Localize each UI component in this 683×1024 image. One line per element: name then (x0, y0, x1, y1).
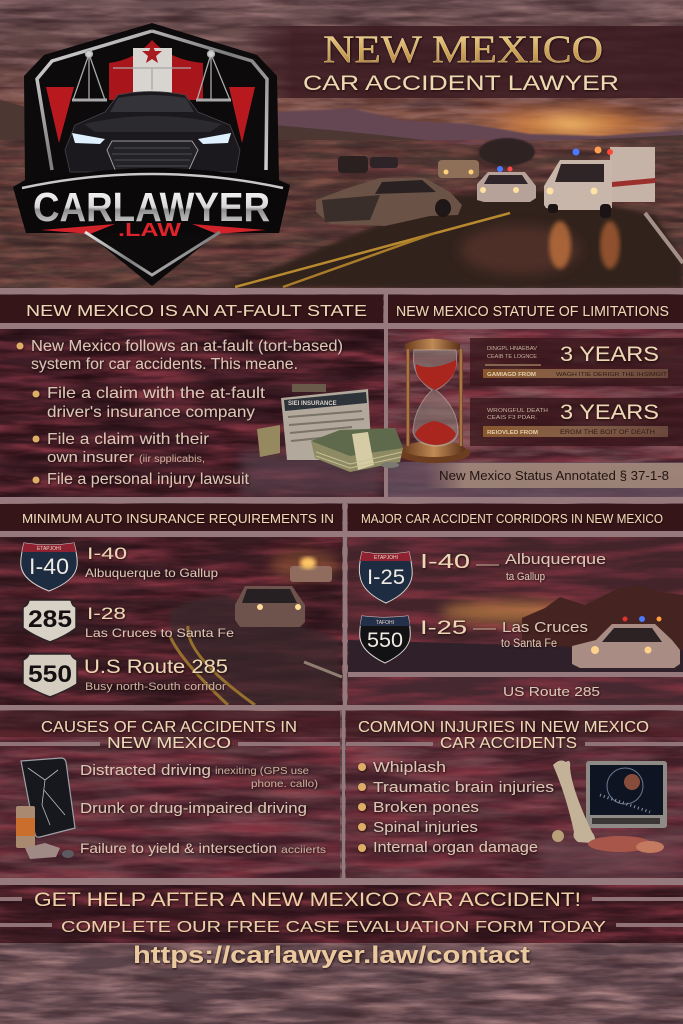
icon: bone (553, 761, 595, 843)
panel texture (388, 329, 683, 497)
band texture (0, 885, 683, 943)
heading: NEW MEXICO IS AN AT-FAULT STATE (26, 303, 367, 320)
citation band (425, 463, 683, 488)
panel: call to action (0, 885, 683, 969)
icon: hourglass (398, 338, 470, 463)
ambulance (544, 146, 655, 218)
header band (0, 504, 342, 531)
label: I-40: I-40 (87, 544, 127, 563)
wet road (225, 190, 683, 288)
label: I-40 Albuquerque: Albuquerque (505, 552, 606, 568)
panel: at-fault state (0, 295, 384, 497)
panel: statute of limitations (388, 295, 683, 497)
label: U.S Route 285 (84, 657, 228, 693)
desert ground (0, 100, 683, 288)
icon: small cash stack (257, 425, 280, 457)
statute block 2: WRONGFUL DEATH (487, 408, 548, 414)
panel: major corridors (348, 504, 683, 705)
icon: rocks (25, 843, 74, 859)
section dividers (0, 288, 683, 885)
3 years: 3 YEARS (560, 343, 659, 366)
red and white crest (46, 40, 255, 143)
lower chevron (85, 232, 220, 275)
title (303, 28, 619, 95)
label: I-28: Las Cruces to Santa Fe (85, 626, 234, 640)
bullet intro: system for car accidents. This meane. (31, 356, 298, 373)
panel scene (348, 537, 683, 705)
bullet list: File a personal injury lawsuit (47, 471, 250, 488)
statute block 2 (483, 401, 668, 437)
bullet list: own insurer (47, 449, 134, 466)
label: I-25 Las Cruces: I-25 (420, 618, 467, 639)
label: I-25 Las Cruces (420, 618, 588, 650)
causes list (80, 762, 326, 856)
icon: route shield 285: 285 (28, 606, 72, 633)
icon: route shield 550: 550 (28, 661, 72, 688)
icon: distant cars (290, 557, 332, 582)
mountains (274, 108, 683, 150)
bullet list: File a claim with the at-fault (47, 385, 266, 402)
scales of justice (72, 50, 231, 100)
heading rule (346, 742, 683, 746)
injuries list: Internal organ damage (373, 839, 538, 856)
statute block 2: REIOVLED FROM (487, 430, 538, 436)
citation: New Mexico Status Annotated § 37-1-8 (439, 469, 669, 483)
label: I-28 (85, 604, 234, 640)
causes list: Failure to yield & intersection (80, 840, 277, 856)
icon: interstate shield I-40: I-40 (29, 554, 69, 579)
shield body (13, 23, 290, 286)
statute block 1: DINGPL HNAEBAV (487, 346, 537, 352)
title line 1: NEW MEXICO (323, 28, 603, 71)
distant pickup (438, 160, 479, 178)
icon: interstate shield I-25: I-25 (367, 566, 405, 589)
heading: CAR ACCIDENTS (440, 735, 577, 752)
label: U.S Route 285: Busy north-South corridor (85, 681, 226, 693)
.law: .LAW (118, 220, 181, 240)
bullet list: driver's insurance company (47, 404, 255, 421)
icon: insurance form (281, 384, 372, 460)
panel: common injuries (346, 711, 683, 878)
icon: pill bottle (16, 806, 35, 848)
panel: minimum auto insurance (0, 504, 342, 705)
desert sky (0, 0, 683, 146)
panel texture (0, 329, 384, 497)
statute block 2: CEAIS F3 PDAR. (487, 415, 537, 421)
icon: route shield 550 (23, 654, 77, 697)
injuries list: Whiplash (373, 759, 446, 776)
icon: insurance form: SIEI INSURANCE (288, 401, 337, 407)
heading: MINIMUM AUTO INSURANCE REQUIREMENTS IN (22, 511, 334, 526)
label: I-40 Albuquerque (420, 551, 606, 583)
icon: interstate shield 550: 550 (367, 629, 403, 652)
statute block 1: CEAIB TE LOGNCE (487, 354, 537, 360)
label: I-40: Albuquerque to Gallup (85, 566, 218, 580)
label: U.S Route 285: U.S Route 285 (84, 657, 228, 678)
tree (479, 138, 535, 166)
panel: hero scene (0, 0, 683, 288)
bullet list: File a claim with their (47, 431, 210, 448)
headline: GET HELP AFTER A NEW MEXICO CAR ACCIDENT! (34, 890, 581, 911)
red wings (41, 224, 266, 234)
panel: causes of car accidents (0, 711, 340, 878)
icon: interstate shield I-40 (21, 543, 77, 591)
statute block 2: ERGM THE BOIT OF DEATH (560, 429, 655, 436)
label: I-28: I-28 (87, 604, 126, 623)
header band (348, 504, 683, 531)
injuries list: Broken pones (373, 799, 479, 816)
injuries list: Spinal injuries (373, 819, 478, 836)
heading rule (0, 742, 340, 746)
bullet list (32, 385, 266, 488)
icon: cash bundle (311, 428, 403, 472)
header band (388, 295, 683, 323)
causes list: inexiting (GPS use (215, 765, 309, 777)
url: https://carlawyer.law/contact (133, 942, 530, 969)
icon: interstate shield I-25: ETAPJOHI (374, 555, 398, 561)
injuries list: Traumatic brain injuries (373, 779, 554, 796)
icon: car on road (235, 586, 305, 627)
icon: interstate shield I-40: ETAPJOHI (37, 546, 61, 552)
icon: x-ray monitor (586, 761, 667, 828)
heading: CAUSES OF CAR ACCIDENTS IN (41, 719, 297, 736)
police car (477, 166, 536, 202)
illustration: insurance form and cash (257, 384, 403, 472)
logo banner (13, 168, 290, 240)
car front (65, 92, 240, 172)
wordmark: CARLAWYER (33, 184, 270, 230)
heading: COMMON INJURIES IN NEW MEXICO (358, 719, 649, 736)
label: I-25 Las Cruces: Las Cruces (502, 620, 588, 636)
label: I-40 (85, 544, 218, 580)
panel scene (0, 537, 342, 705)
heading (41, 719, 297, 752)
label: I-40 Albuquerque: ta Gallup (506, 571, 545, 583)
panel texture (346, 711, 683, 878)
title band (240, 26, 683, 98)
causes list: Drunk or drug-impaired driving (80, 800, 307, 817)
heading: NEW MEXICO STATUTE OF LIMITATIONS (396, 304, 669, 320)
bullet list: (iir spplicabis, (139, 454, 205, 465)
statute block 1 (483, 343, 668, 378)
icon: interstate shield I-25 (359, 552, 412, 603)
icon: route shield 285 (23, 600, 76, 642)
icon: interstate shield 550: TAFOHI (376, 620, 394, 626)
heading: NEW MEXICO (107, 735, 231, 752)
label: I-40 Albuquerque: I-40 (420, 551, 470, 573)
subheadline: COMPLETE OUR FREE CASE EVALUATION FORM TODAY (61, 919, 606, 936)
side rules (0, 899, 683, 925)
statute block 1: GAMIAGD FROM (487, 372, 536, 378)
bullet intro: New Mexico follows an at-fault (tort-based) (31, 338, 343, 355)
label: I-25 Las Cruces: to Santa Fe (501, 638, 557, 650)
distant dark cars (338, 156, 398, 173)
icon: police car (572, 616, 680, 668)
causes list: Distracted driving (80, 762, 211, 779)
heading (358, 719, 649, 752)
title line 2: CAR ACCIDENT LAWYER (303, 71, 619, 95)
3 years: 3 YEARS (560, 401, 659, 424)
statute block 1: WAGH ITIE DERIGR THE IHSIMGIT (556, 372, 668, 378)
icon: interstate shield 550 (360, 616, 410, 663)
icon: rubble and organs (552, 830, 664, 853)
header band (0, 295, 383, 323)
bullet intro (16, 338, 343, 373)
label: US Route 285: US Route 285 (503, 684, 600, 699)
panel texture (0, 711, 340, 878)
wrecked car (316, 178, 462, 226)
injuries list (358, 759, 554, 856)
causes list: phone. callo) (251, 778, 318, 790)
causes list: acciierts (281, 844, 326, 856)
logo: CarLawyer.law shield (13, 23, 290, 286)
icon: cracked phone (21, 758, 75, 837)
